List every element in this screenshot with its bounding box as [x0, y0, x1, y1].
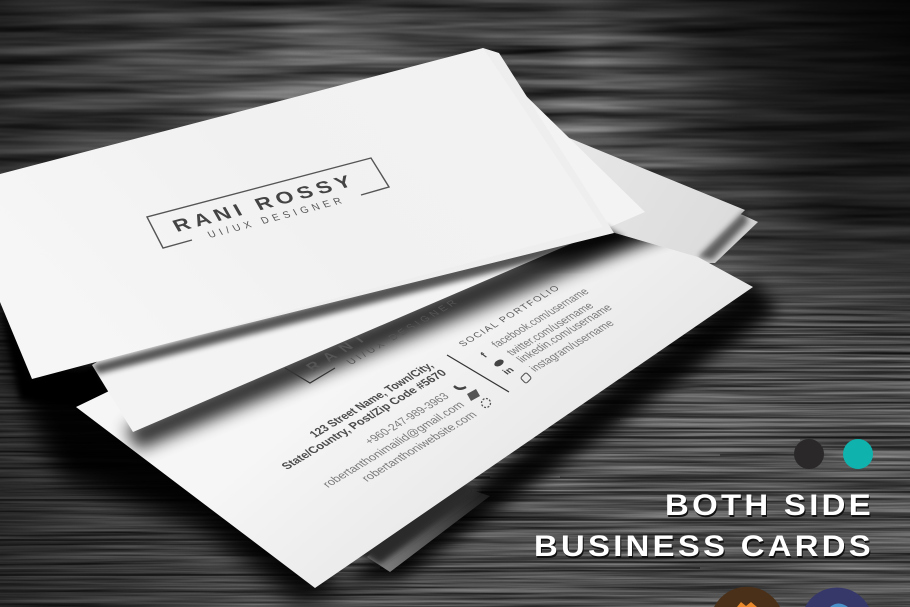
partly hidden logo	[285, 299, 460, 383]
icon: phone	[454, 386, 466, 389]
icon: mail	[467, 389, 480, 401]
social icons: in	[501, 366, 517, 377]
social icons: f	[479, 351, 491, 360]
shadow from middle card	[125, 205, 672, 450]
colour dot: teal	[843, 439, 873, 469]
address text: State/Country, Post/Zip Code #5670	[278, 367, 450, 472]
social links: facebook.com/username	[488, 286, 592, 350]
panel: back of business card	[76, 200, 753, 588]
address text: 123 Street Name, Town/City,	[306, 360, 437, 440]
contact text: robertanthoniwebsite.com	[358, 409, 480, 484]
badge: blue software icon	[805, 587, 869, 607]
logo frame	[147, 158, 389, 248]
title: BOTH SIDE	[665, 489, 874, 522]
partly hidden logo: UI/UX DESIGNER	[345, 299, 460, 367]
title	[534, 489, 874, 563]
logo name: RANI ROSSY	[169, 171, 360, 235]
logo subtitle: UI/UX DESIGNER	[206, 196, 344, 241]
partly hidden logo: RANI	[303, 333, 368, 374]
social heading: SOCIAL PORTFOLIO	[457, 284, 562, 349]
back card, upper right	[540, 118, 748, 260]
colour dot: charcoal	[794, 439, 824, 469]
icon: web	[482, 398, 490, 408]
title: BUSINESS CARDS	[534, 530, 874, 563]
backmost card, upper right	[600, 165, 758, 263]
social links	[488, 286, 617, 374]
shadow on middle card	[92, 226, 625, 374]
card layer under top card	[32, 48, 614, 378]
panel: front of business card	[0, 48, 603, 379]
wood grain lines	[0, 327, 910, 575]
social links: instagram/username	[526, 317, 617, 374]
card under bottom card	[360, 470, 490, 572]
badge: orange software icon	[714, 587, 780, 607]
social icons	[479, 351, 532, 384]
contact text: robertanthonimailid@gmail.com	[319, 399, 468, 490]
social links: linkedin.com/username	[513, 302, 615, 365]
pile shadow	[0, 280, 780, 605]
social links: twitter.com/username	[503, 300, 597, 358]
contact text: +960-247-989-3963	[361, 390, 452, 447]
panel: middle card	[92, 90, 645, 432]
divider	[447, 355, 509, 392]
